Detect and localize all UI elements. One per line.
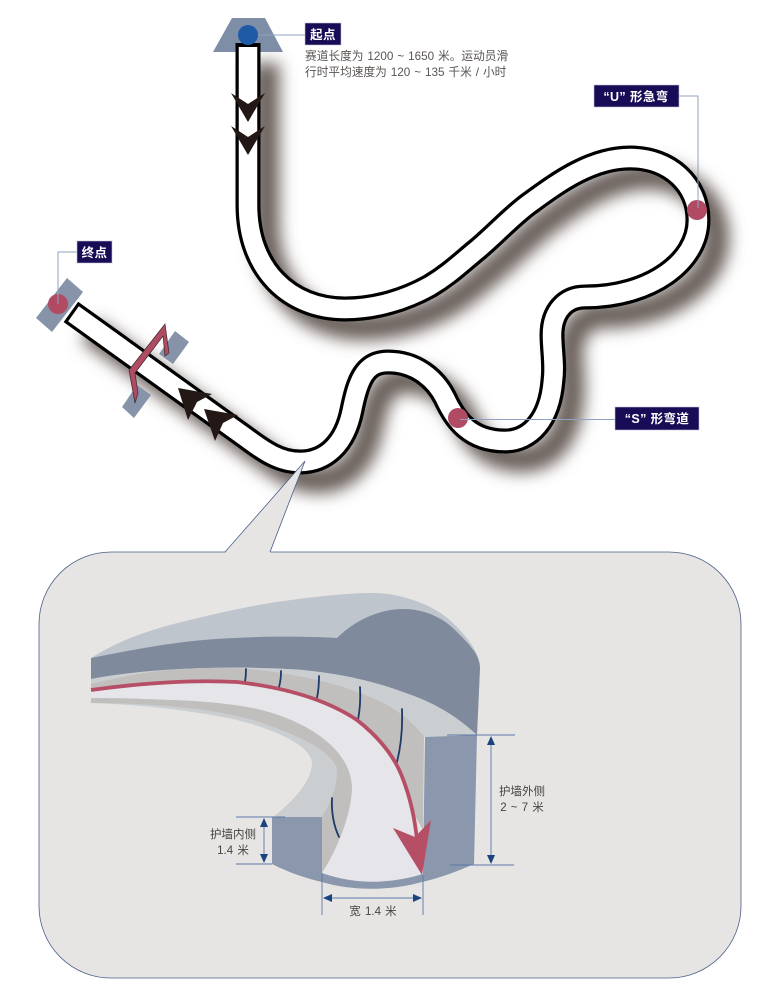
U bend leader line <box>679 96 698 208</box>
U bend label: “U” 形急弯 <box>603 89 669 104</box>
inner ledge <box>91 697 360 817</box>
start label <box>305 23 341 45</box>
S bend leader line <box>460 418 615 420</box>
banked gray wall <box>91 668 424 830</box>
panel: curve detail <box>39 552 741 978</box>
start label: 起点 <box>310 27 336 42</box>
finish label <box>77 241 112 263</box>
dimension: outer wall height: 护墙外侧 <box>499 784 545 798</box>
icon: track arrow 2 <box>204 409 238 441</box>
icon: downward arrow 2 <box>231 126 265 155</box>
dimension: outer wall height: 2 ~ 7 米 <box>500 801 544 814</box>
U bend dot <box>687 200 707 220</box>
outer wall top surface <box>91 593 480 735</box>
track floor <box>91 681 422 882</box>
dimension: inner wall height <box>210 817 285 864</box>
red gate marker <box>129 324 169 403</box>
dimension: track width <box>322 873 423 918</box>
start leader line <box>248 34 305 36</box>
U bend label <box>594 85 679 107</box>
start gate trapezoid <box>213 18 283 52</box>
lower band <box>272 735 477 889</box>
dimension: inner wall height: 1.4 米 <box>217 844 249 857</box>
dimension: inner wall height: 护墙内侧 <box>210 827 256 841</box>
finish dot <box>48 294 68 314</box>
track description <box>305 49 508 79</box>
S bend label <box>615 407 699 430</box>
gate block upper <box>159 331 189 364</box>
finish gate block <box>36 278 83 332</box>
dimension: track width: 宽 1.4 米 <box>349 904 397 918</box>
track shadow <box>89 63 716 480</box>
chart: banked curve cross-section <box>91 593 545 918</box>
seam lines <box>245 669 402 837</box>
icon: track arrow 1 <box>178 388 212 420</box>
S bend dot <box>448 408 468 428</box>
icon: downward arrow 1 <box>231 93 265 122</box>
track description: 行时平均速度为 120 ~ 135 千米 / 小时 <box>305 65 507 79</box>
outer wall top ledge <box>91 668 477 737</box>
S bend label: “S” 形弯道 <box>625 411 689 426</box>
dimension: outer wall height <box>447 735 545 865</box>
outer wall inner face <box>91 609 480 735</box>
track <box>64 43 698 462</box>
finish leader line <box>58 252 77 304</box>
start dot <box>238 25 258 45</box>
red racing line arrow <box>91 681 431 875</box>
inner gray strip <box>91 697 370 873</box>
finish label: 终点 <box>82 245 107 260</box>
callout pointer <box>225 461 305 553</box>
track description: 赛道长度为 1200 ~ 1650 米。运动员滑 <box>305 49 508 63</box>
gate block lower <box>122 385 151 418</box>
